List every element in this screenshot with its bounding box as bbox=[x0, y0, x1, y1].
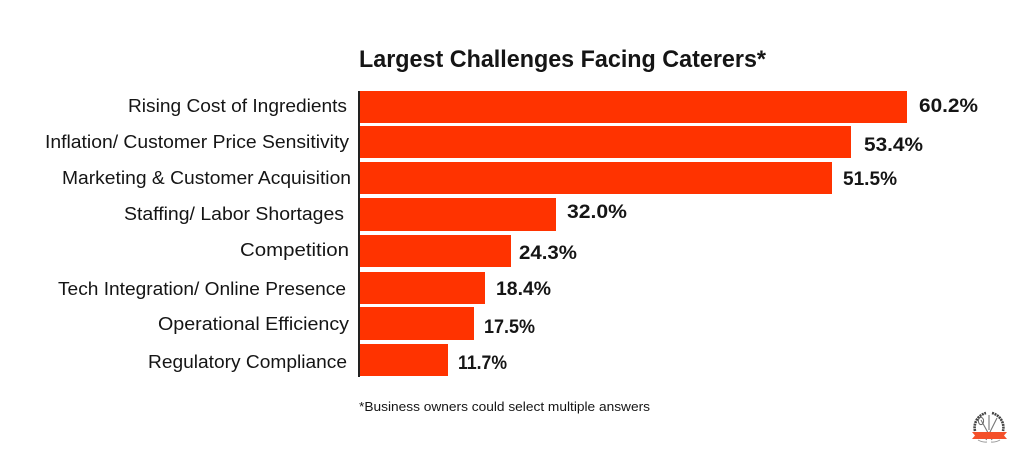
bar: Competition: Competition bbox=[240, 239, 349, 260]
bar: Tech Integration: Tech Integration/ Online Presence bbox=[58, 278, 346, 299]
bar: Marketing bbox=[62, 162, 897, 194]
title: Largest Challenges Facing Caterers* bbox=[359, 46, 766, 73]
bar: Rising Cost of Ingredients: 60.2% bbox=[919, 96, 978, 117]
bar: Staffing: Staffing/ Labor Shortages bbox=[124, 203, 344, 224]
bar: Staffing: 32.0% bbox=[567, 202, 627, 223]
bar: Regulatory Compliance: 11.7% bbox=[458, 353, 507, 374]
bar: Marketing: 51.5% bbox=[843, 169, 897, 190]
bar: Tech Integration bbox=[58, 272, 551, 304]
bar chart bbox=[45, 91, 978, 377]
bar: Inflation bbox=[45, 126, 923, 158]
bar: Regulatory Compliance: Regulatory Compliance bbox=[148, 351, 347, 372]
bar: Rising Cost of Ingredients: Rising Cost of Ingredients bbox=[128, 95, 347, 116]
bar: Staffing bbox=[124, 198, 627, 231]
bar: Operational Efficiency bbox=[158, 307, 535, 340]
bar: Competition: 24.3% bbox=[519, 243, 577, 264]
bar: Regulatory Compliance bbox=[148, 344, 507, 376]
bar: Tech Integration: 18.4% bbox=[496, 279, 551, 300]
icon: logo badge bbox=[972, 413, 1007, 442]
bar: Inflation: 53.4% bbox=[864, 135, 923, 156]
bar: Operational Efficiency: Operational Efficiency bbox=[158, 313, 350, 334]
bar: Operational Efficiency: 17.5% bbox=[484, 317, 535, 338]
footnote: *Business owners could select multiple answers bbox=[359, 399, 651, 414]
bar: Marketing: Marketing & Customer Acquisition bbox=[62, 167, 351, 188]
axis line bbox=[358, 91, 360, 377]
bar: Competition bbox=[240, 235, 577, 267]
bar: Rising Cost of Ingredients bbox=[128, 91, 978, 123]
bar: Inflation: Inflation/ Customer Price Sensitivity bbox=[45, 131, 350, 152]
